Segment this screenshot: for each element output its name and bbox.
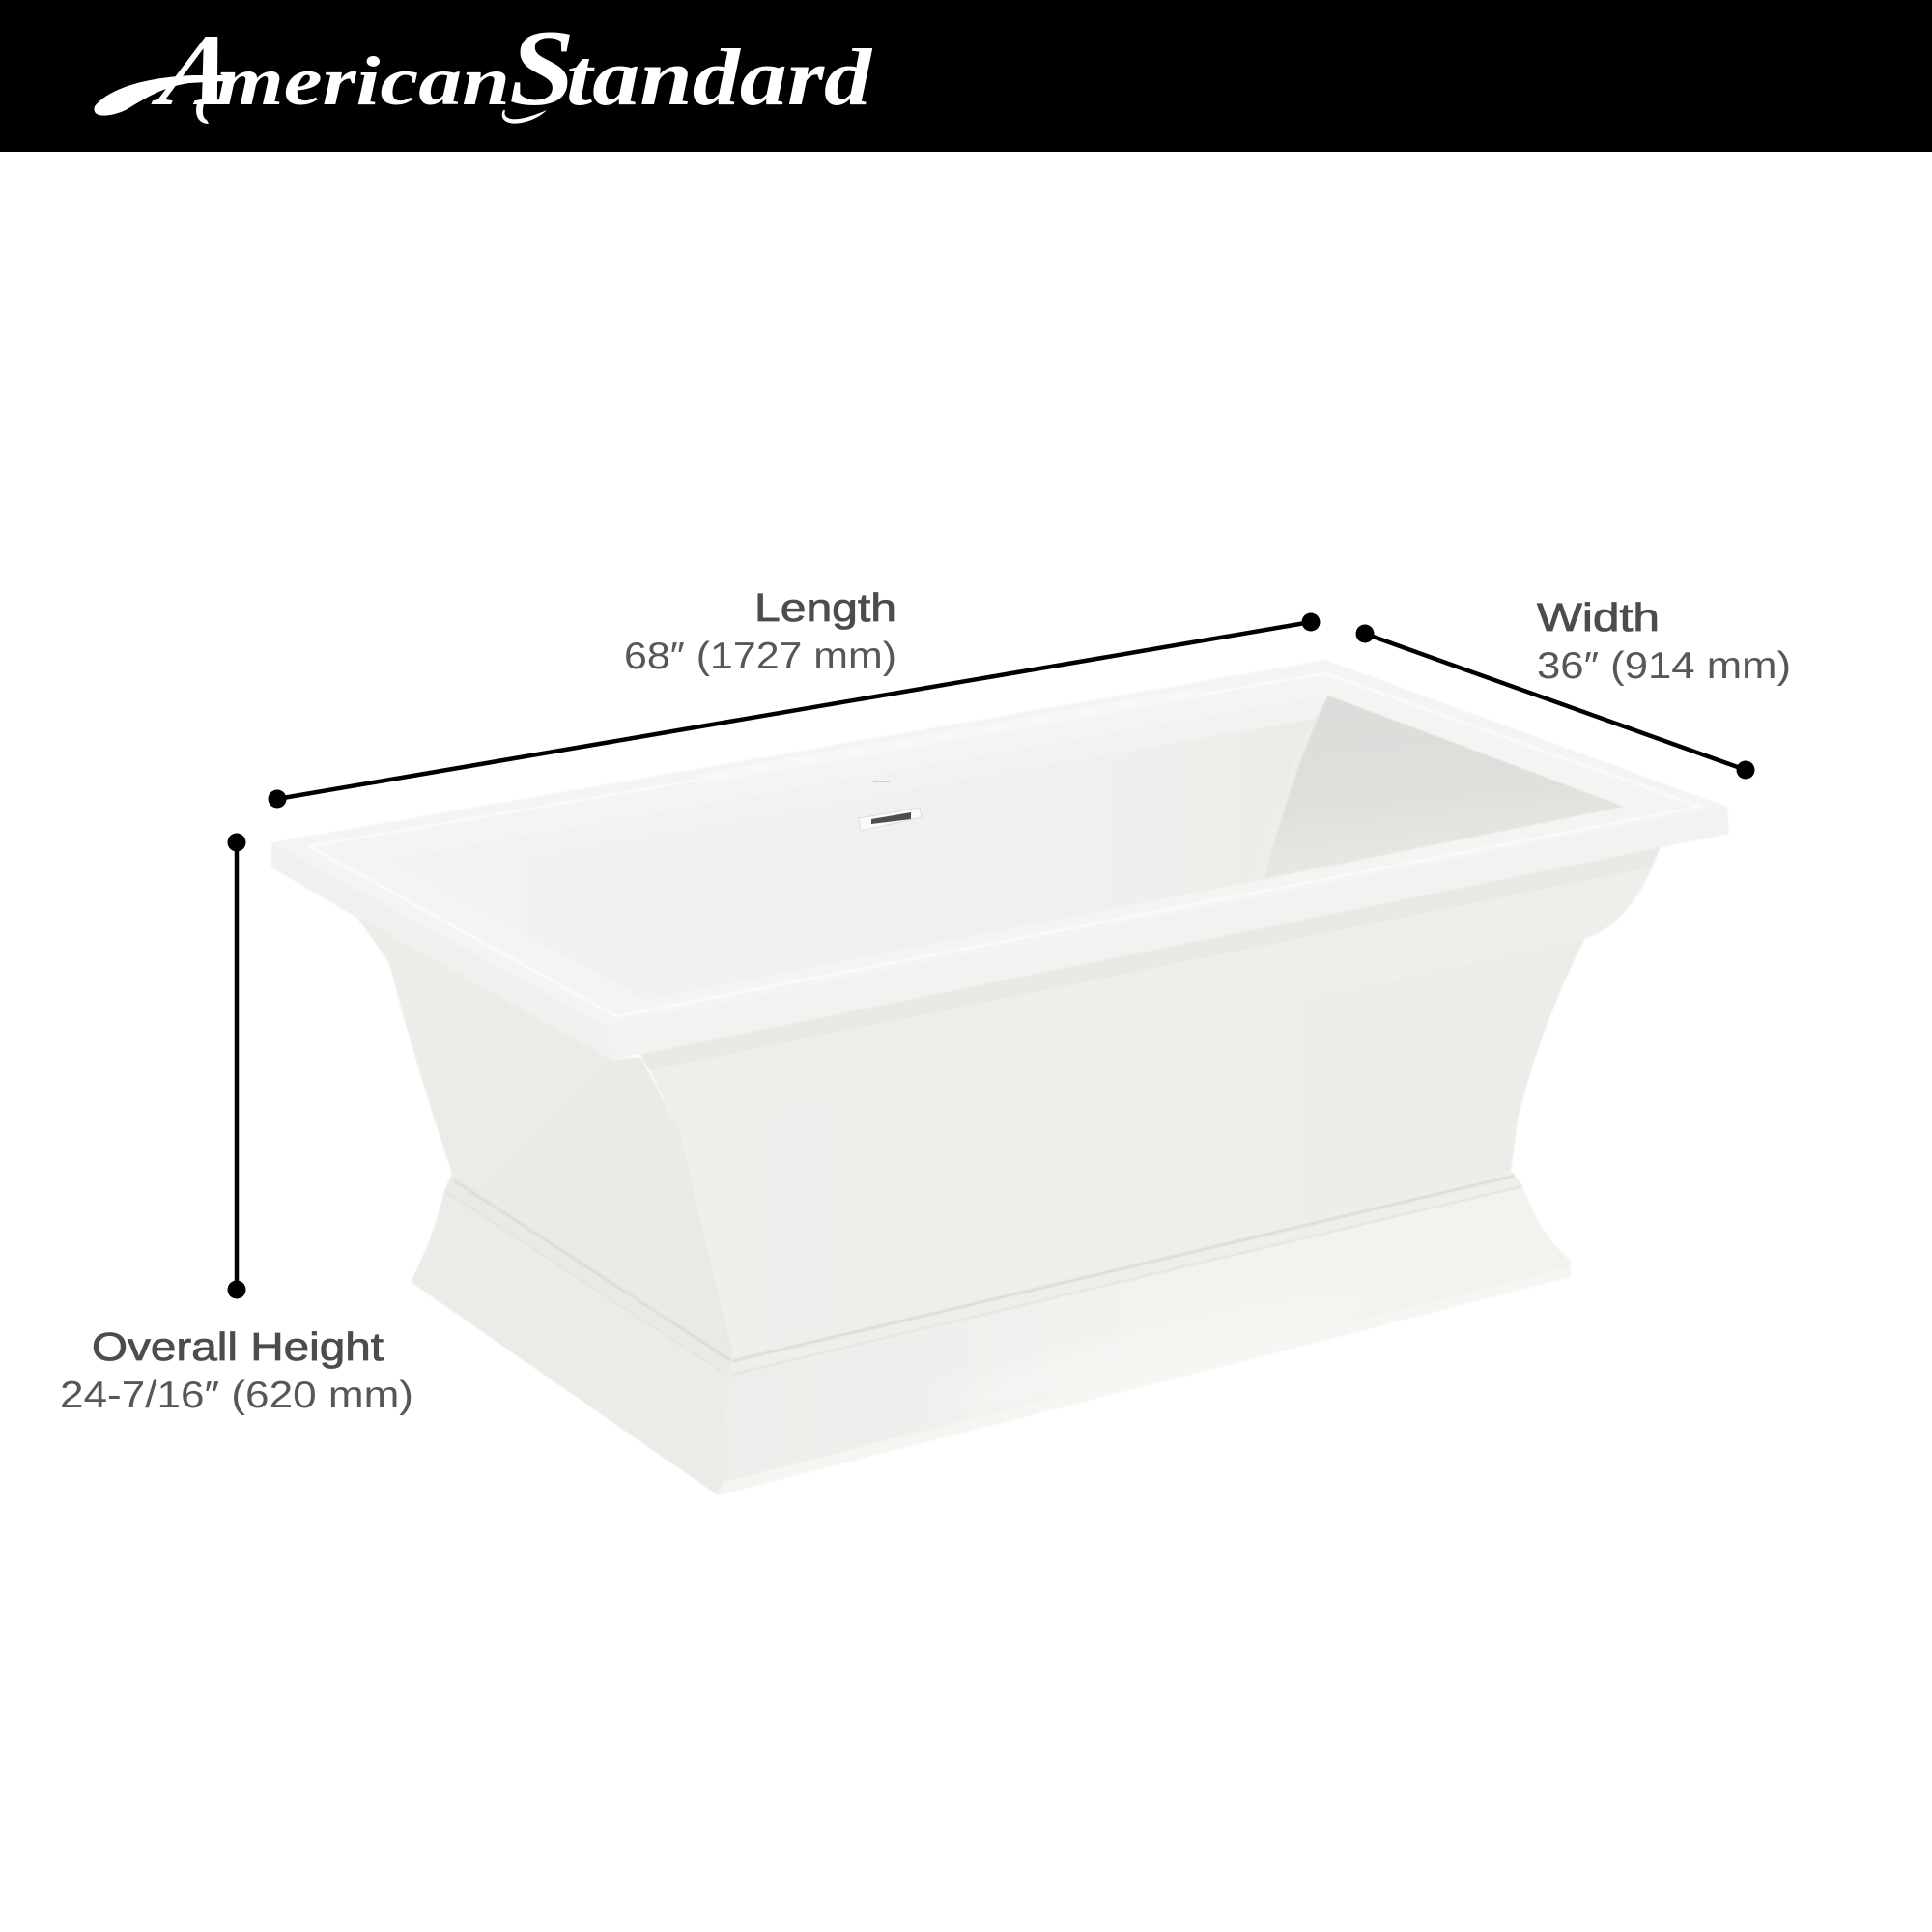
logo flourish: A tail — [196, 100, 209, 124]
tub basin corner highlight — [1246, 696, 1328, 883]
tub molding front — [729, 1171, 1522, 1375]
tub body front face — [679, 939, 1584, 1354]
rim inner step — [309, 673, 1700, 1016]
tub base plinth left face — [411, 1190, 729, 1495]
logo flourish: A loop — [94, 75, 228, 116]
plinth mottled highlight — [939, 1278, 1379, 1427]
bathtub illustration — [271, 660, 1729, 1495]
logo: American Standard — [94, 9, 873, 128]
dimension line: overall height — [228, 833, 245, 1298]
label: overall height — [60, 1324, 413, 1416]
logo: American Standard: merican — [216, 43, 510, 120]
logo flourish: S tail — [502, 110, 547, 124]
label: length: 68″ (1727 mm) — [624, 636, 896, 677]
tiny maker mark — [873, 781, 890, 782]
label: overall height: 24-7/16″ (620 mm) — [60, 1375, 413, 1416]
label: length: Length — [754, 585, 896, 630]
tub base plinth front face — [718, 1185, 1571, 1495]
tub molding groove lines — [446, 1176, 1522, 1375]
logo: American Standard: S — [509, 9, 575, 128]
logo: American Standard: A — [146, 14, 245, 128]
tub flare shadow under rim — [640, 846, 1661, 1070]
label: length — [624, 585, 896, 677]
rim top — [271, 660, 1727, 1026]
overflow drain — [859, 781, 922, 831]
label: width — [1537, 595, 1791, 687]
overflow slot — [871, 812, 911, 824]
tub basin long wall — [389, 696, 1328, 1000]
dimension line: length — [269, 612, 1320, 808]
logo: American Standard: tandard — [566, 33, 873, 123]
rim front face — [607, 807, 1729, 1060]
overflow plate — [859, 808, 922, 831]
tub body left face — [271, 867, 733, 1354]
label: overall height: Overall Height — [92, 1324, 384, 1369]
header bar — [0, 0, 1932, 152]
tub basin back ledge — [389, 696, 1328, 874]
label: width: 36″ (914 mm) — [1537, 645, 1791, 687]
rim left face — [271, 842, 611, 1060]
tub molding left — [444, 1174, 733, 1375]
label: width: Width — [1537, 595, 1660, 639]
tub rim highlight on back — [696, 688, 1200, 784]
dimension line: width — [1356, 624, 1754, 779]
tub upper flare front — [640, 846, 1661, 1130]
tub basin end wall — [1264, 696, 1624, 879]
tub base bottom edge highlight — [718, 1266, 1571, 1495]
